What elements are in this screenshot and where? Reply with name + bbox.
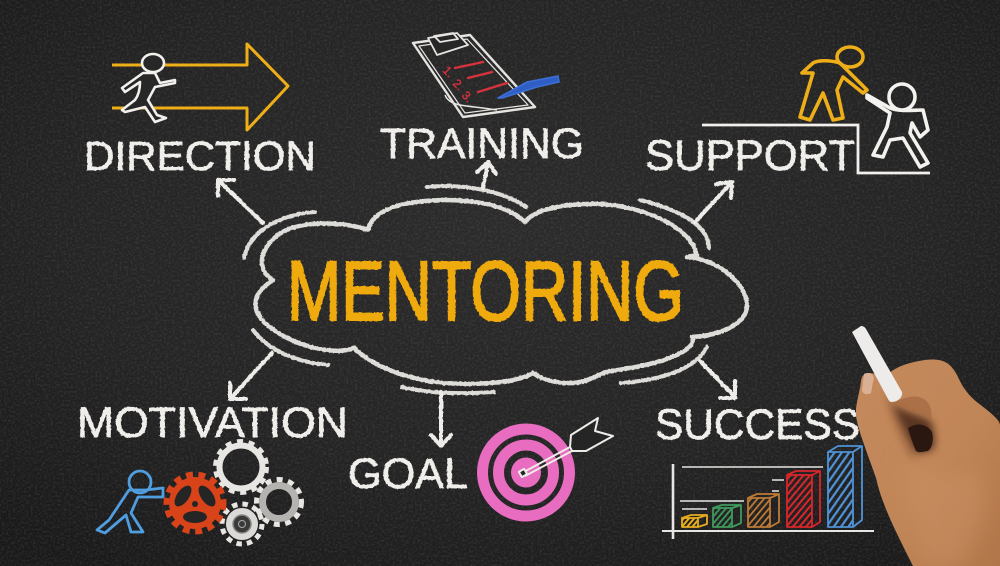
icon: running figure — [122, 54, 175, 122]
icon: grey gear — [256, 480, 302, 524]
thumb edge shading — [888, 395, 913, 458]
icon: white gear — [216, 442, 266, 492]
arrow: to support — [695, 182, 732, 222]
icon: dart — [519, 418, 613, 477]
panel: motivation — [77, 399, 348, 544]
thumbnail — [862, 373, 874, 394]
clipboard list: 1. — [440, 63, 457, 80]
arrow: to direction — [218, 180, 263, 223]
clipboard list: 2. — [450, 76, 467, 93]
heading: motivation: MOTIVATION — [77, 399, 348, 447]
icon: red gear — [166, 474, 224, 532]
icon: step line — [702, 125, 930, 173]
bar chart — [682, 446, 862, 527]
icon: yellow arrow — [112, 44, 288, 130]
icon: small gear — [222, 504, 262, 544]
bar: red — [787, 471, 820, 527]
icon: white climbing figure — [867, 84, 928, 167]
icon: blue pushing figure — [97, 471, 163, 533]
hand — [856, 360, 1000, 566]
icon: pink target — [482, 429, 570, 516]
panel: support — [645, 47, 930, 180]
clipboard list: 3. — [459, 88, 476, 105]
fingers band — [893, 397, 932, 420]
arrow: to motivation — [230, 353, 272, 399]
chart axes — [662, 464, 874, 539]
central cloud with MENTORING — [244, 186, 747, 393]
panel: success — [655, 401, 874, 539]
chalk stick — [852, 326, 902, 402]
bar: orange — [748, 494, 779, 527]
arrow: to goal — [431, 392, 451, 446]
cloud outline — [244, 186, 747, 393]
icon: clipboard — [413, 33, 535, 117]
dark gap — [908, 425, 933, 452]
heading: training: TRAINING — [380, 120, 584, 168]
heading: support: SUPPORT — [645, 132, 855, 180]
icon: yellow helper figure — [800, 47, 867, 120]
bar: yellow — [682, 515, 707, 527]
palm shading — [900, 455, 983, 566]
bar: green — [713, 505, 741, 527]
panel: goal — [348, 418, 613, 516]
arrow: to success — [700, 361, 735, 398]
bar: blue — [828, 446, 862, 527]
hand holding chalk — [852, 326, 1000, 566]
clipboard list — [440, 62, 507, 105]
heading: goal: GOAL — [348, 450, 468, 498]
arrow: to training — [477, 162, 496, 188]
cloud title: MENTORING — [287, 244, 684, 338]
panel: direction — [84, 44, 316, 179]
shadow between fingers — [892, 403, 935, 453]
icon: blue pen — [498, 76, 559, 98]
heading: success: SUCCESS — [655, 401, 860, 449]
panel: training — [380, 33, 584, 168]
heading: direction: DIRECTION — [84, 133, 316, 179]
